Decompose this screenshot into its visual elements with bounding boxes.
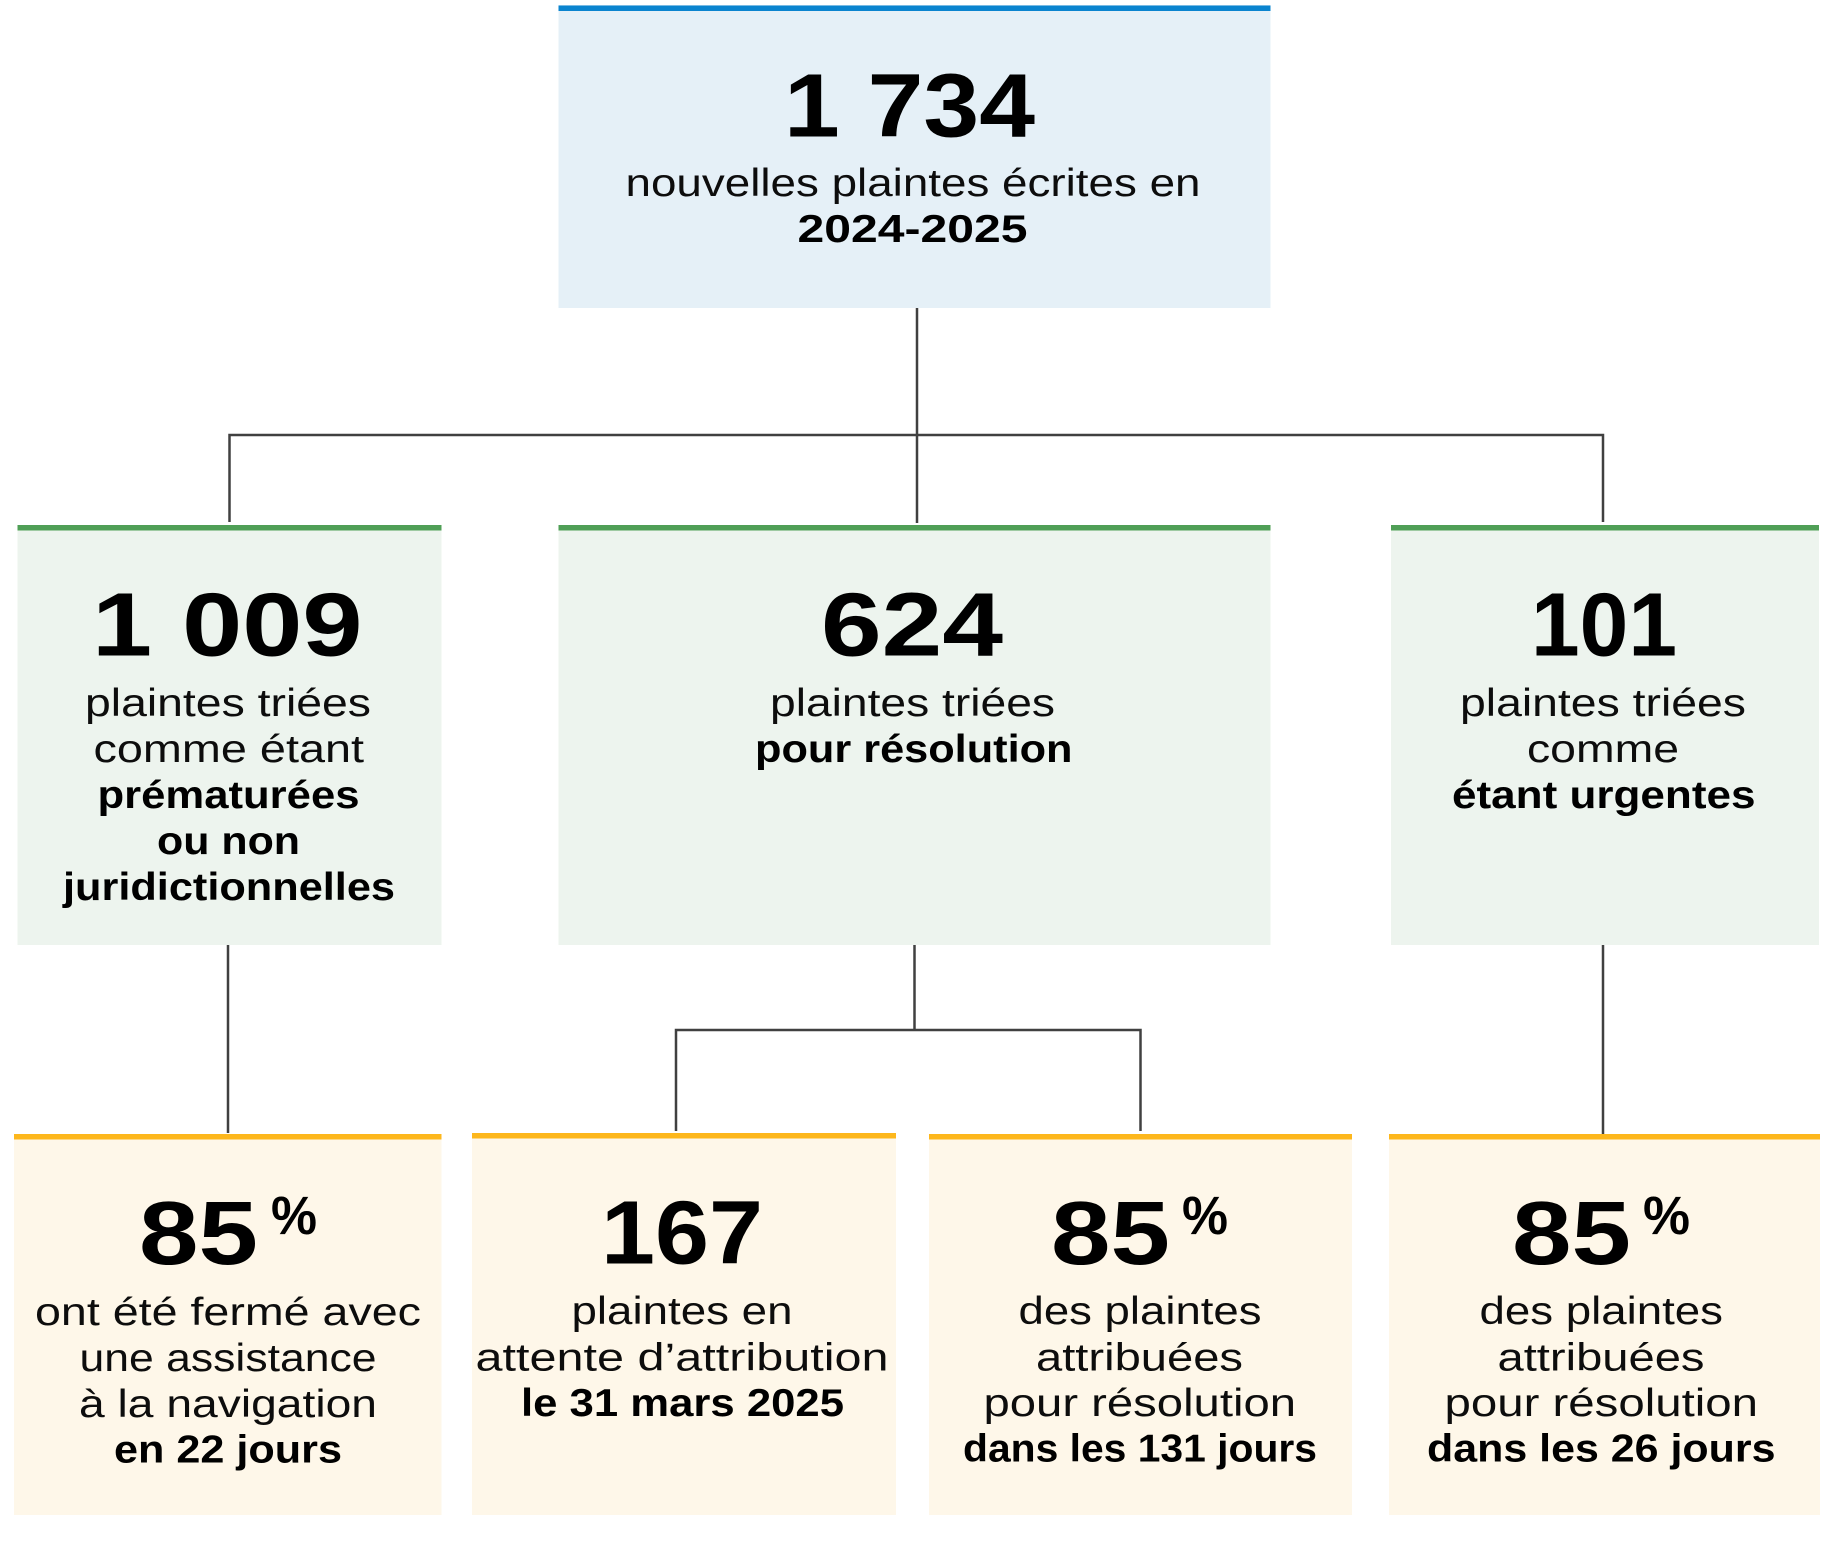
panel: resolved within 131 days: attribuées <box>1036 1336 1243 1380</box>
panel: complaints triaged for resolution <box>558 525 1270 945</box>
panel: premature or non-jurisdictional complaints: plaintes triées <box>85 682 371 725</box>
panel: complaints triaged for resolution: 624 <box>821 576 1003 676</box>
panel: premature or non-jurisdictional complaints <box>18 525 442 945</box>
panel: urgent complaints: étant urgentes <box>1452 774 1756 817</box>
panel: premature or non-jurisdictional complaints: juridictionnelles <box>62 866 395 909</box>
panel: closed with navigation assistance: une assistance <box>80 1337 376 1380</box>
panel: total new complaints: nouvelles plaintes écrites en <box>626 162 1200 205</box>
panel: complaints awaiting assignment: attente d’attribution <box>476 1336 888 1380</box>
panel: complaints triaged for resolution: pour résolution <box>755 728 1072 771</box>
panel: closed with navigation assistance: à la navigation <box>79 1383 377 1426</box>
panel: complaints awaiting assignment: plaintes en <box>572 1290 792 1333</box>
panel: resolved within 26 days: attribuées <box>1498 1336 1704 1380</box>
panel: closed with navigation assistance: en 22 jours <box>114 1428 342 1472</box>
panel: premature or non-jurisdictional complaints: ou non <box>157 820 300 863</box>
panel: resolved within 131 days: des plaintes <box>1018 1290 1262 1333</box>
panel: resolved within 26 days: dans les 26 jours <box>1427 1428 1776 1470</box>
panel: complaints awaiting assignment: le 31 mars 2025 <box>521 1382 844 1425</box>
panel: urgent complaints <box>1391 525 1819 945</box>
panel: premature or non-jurisdictional complaints: 1 009 <box>92 576 362 676</box>
panel: resolved within 131 days: 85 <box>1051 1184 1170 1284</box>
connector lines: top level to triage level <box>230 308 1603 523</box>
panel: urgent complaints: plaintes triées <box>1460 682 1746 725</box>
connector lines: triage level to result level <box>228 945 1603 1136</box>
panel: resolved within 26 days: pour résolution <box>1444 1382 1758 1425</box>
panel: total new complaints: 1 734 <box>784 56 1035 156</box>
panel: resolved within 26 days: 85 <box>1512 1184 1631 1284</box>
panel: urgent complaints: 101 <box>1531 576 1677 676</box>
panel: resolved within 26 days <box>1389 1134 1820 1515</box>
panel: closed with navigation assistance: ont été fermé avec <box>35 1291 421 1334</box>
panel: resolved within 26 days: % <box>1643 1186 1690 1246</box>
panel: closed with navigation assistance <box>14 1134 442 1515</box>
panel: resolved within 26 days: des plaintes <box>1480 1290 1723 1333</box>
panel: resolved within 131 days <box>929 1134 1352 1515</box>
panel: complaints triaged for resolution: plaintes triées <box>770 682 1055 725</box>
panel: premature or non-jurisdictional complaints: prématurées <box>98 774 360 817</box>
panel: closed with navigation assistance: % <box>271 1186 317 1246</box>
panel: resolved within 131 days: % <box>1182 1186 1228 1246</box>
panel: urgent complaints: comme <box>1527 728 1679 771</box>
panel: resolved within 131 days: pour résolution <box>984 1382 1296 1425</box>
panel: complaints awaiting assignment: 167 <box>601 1184 763 1284</box>
panel: total new complaints <box>558 5 1270 308</box>
panel: resolved within 131 days: dans les 131 jours <box>963 1428 1317 1470</box>
panel: premature or non-jurisdictional complaints: comme étant <box>94 728 364 771</box>
panel: complaints awaiting assignment <box>472 1133 896 1515</box>
panel: total new complaints: 2024-2025 <box>798 208 1028 251</box>
panel: closed with navigation assistance: 85 <box>139 1184 258 1284</box>
